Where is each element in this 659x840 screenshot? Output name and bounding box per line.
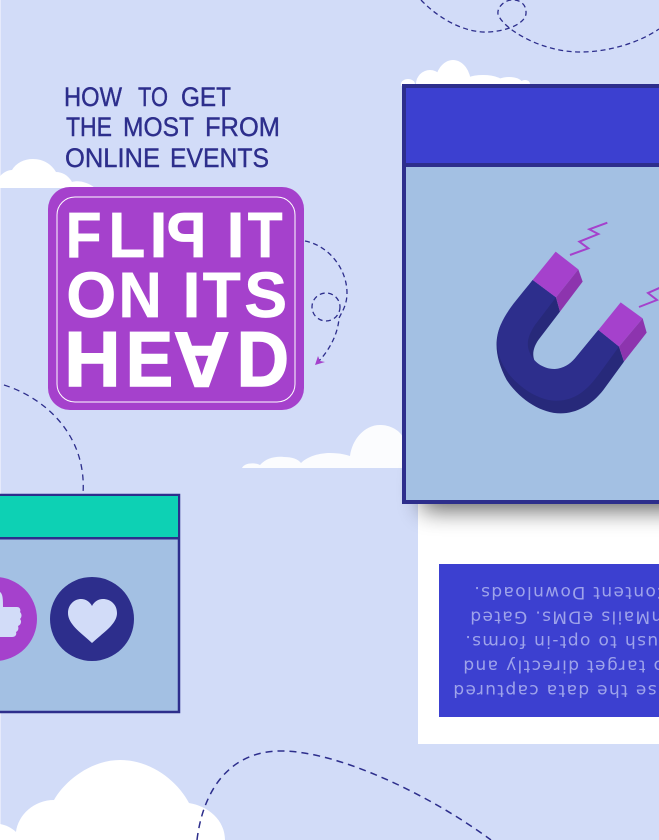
badge: flip it on its head: N xyxy=(119,260,162,331)
cloud: top right xyxy=(401,60,530,108)
dashed flight path: lower left xyxy=(4,385,83,494)
cloud: left behind badge xyxy=(0,159,95,188)
badge: flip it on its head: I xyxy=(183,259,200,331)
panel: reactions window xyxy=(0,495,179,712)
badge: flip it on its head: S xyxy=(244,259,287,331)
panel: right caption card xyxy=(418,470,659,744)
badge: flip it on its head: T xyxy=(248,199,283,271)
icon: thumbs up xyxy=(0,577,37,661)
cloud: bottom left xyxy=(0,760,225,840)
badge: flip it on its head: O xyxy=(66,259,116,331)
panel: magnet window xyxy=(404,86,659,502)
dashed flight path: top xyxy=(421,0,659,52)
title: how to get the most from online events xyxy=(64,82,280,173)
title: how to get the most from online events: TO xyxy=(138,82,168,112)
title: how to get the most from online events: FROM xyxy=(205,112,280,142)
badge: flip it on its head xyxy=(48,187,304,410)
badge: flip it on its head: L xyxy=(108,200,145,271)
title: how to get the most from online events: HOW xyxy=(64,82,122,112)
title: how to get the most from online events: GET xyxy=(181,82,231,112)
badge: flip it on its head: P xyxy=(167,200,206,271)
badge: flip it on its head: I xyxy=(227,199,244,271)
badge: flip it on its head: T xyxy=(203,260,241,331)
badge: flip it on its head: I xyxy=(150,199,167,271)
dashed flight path: bottom xyxy=(197,751,491,840)
title: how to get the most from online events: ONLINE xyxy=(65,143,160,173)
title: how to get the most from online events: THE xyxy=(66,112,112,142)
cloud: centre xyxy=(242,425,404,468)
icon: magnet xyxy=(497,223,659,413)
badge: flip it on its head: F xyxy=(66,200,102,272)
caption box with upside-down text xyxy=(439,564,659,717)
title: how to get the most from online events: MOST xyxy=(123,112,194,142)
badge: flip it on its head: D xyxy=(237,316,289,403)
title: how to get the most from online events: EVENTS xyxy=(170,143,269,173)
badge: flip it on its head: A xyxy=(174,316,230,404)
dashed arrow beside badge xyxy=(305,241,347,365)
badge: flip it on its head: E xyxy=(126,315,173,403)
badge: flip it on its head: H xyxy=(64,315,121,403)
icon: heart xyxy=(50,577,134,661)
